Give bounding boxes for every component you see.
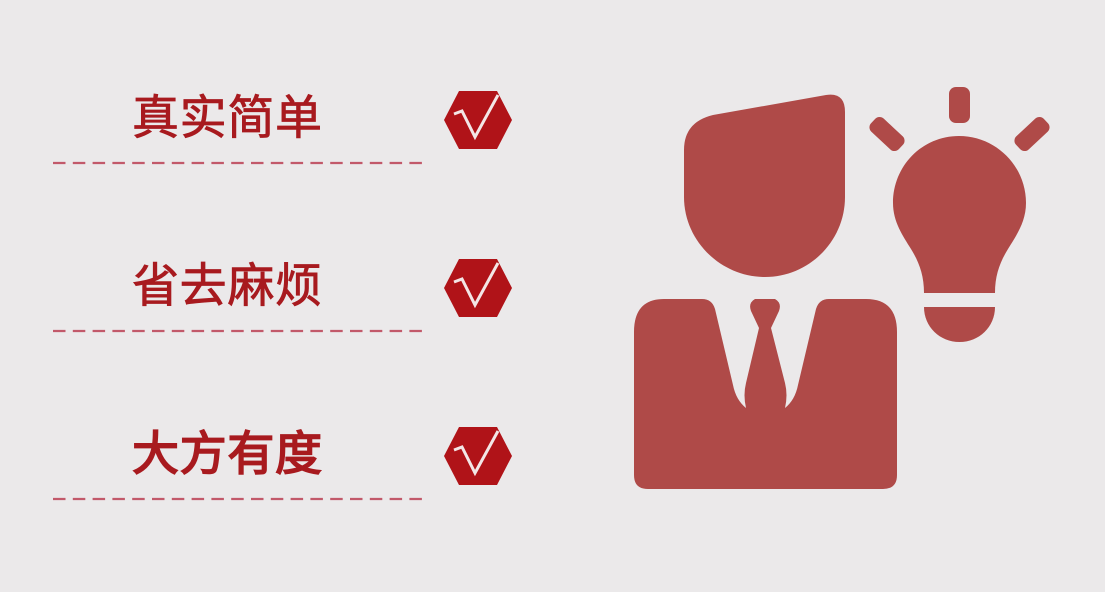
person head	[684, 95, 845, 277]
icon: hexagon check	[444, 91, 512, 149]
light rays	[867, 87, 1052, 154]
item: 大方有度	[53, 427, 512, 499]
icon: businessman with light bulb	[634, 87, 1052, 489]
light bulb	[893, 136, 1026, 293]
icon: hexagon check	[444, 427, 512, 485]
item: 省去麻烦	[53, 259, 512, 331]
item: 真实简单	[53, 91, 512, 163]
label: 真实简单: 真实简单	[132, 91, 322, 144]
person body with collar	[634, 299, 897, 489]
bulb base	[924, 307, 995, 342]
label: 大方有度: 大方有度	[132, 427, 322, 480]
icon: hexagon check	[444, 259, 512, 317]
label: 省去麻烦: 省去麻烦	[132, 259, 322, 312]
